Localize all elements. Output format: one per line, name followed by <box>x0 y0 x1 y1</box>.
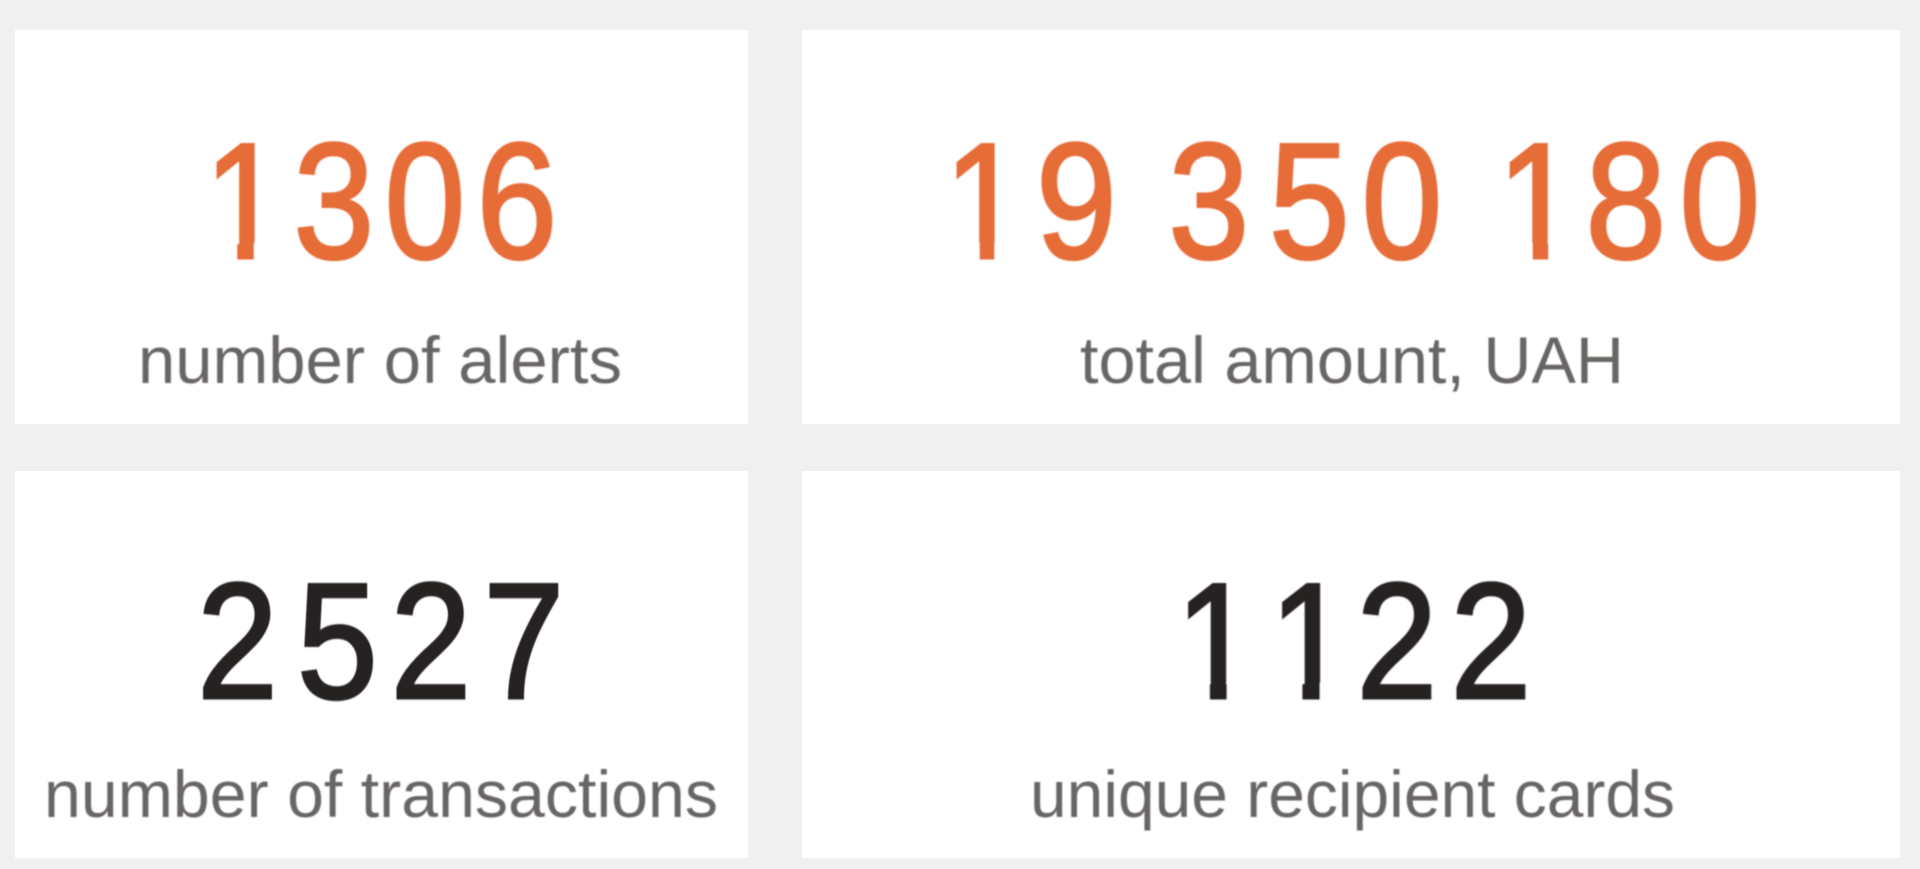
label: number of transactions: number of transactions <box>44 757 718 831</box>
value: number of transactions: 2527 <box>197 548 564 733</box>
panel: total amount <box>802 30 1900 424</box>
label: unique recipient cards: unique recipient cards <box>1030 757 1675 831</box>
label: number of alerts: number of alerts <box>138 323 622 397</box>
value: number of alerts: 1306 <box>204 108 557 293</box>
panel: number of transactions <box>15 471 748 858</box>
value: unique recipient cards: 1122 <box>1176 548 1531 733</box>
value: total amount: 19 350 180 <box>944 108 1760 293</box>
panel: number of alerts <box>15 30 748 424</box>
panel: unique recipient cards <box>802 471 1900 858</box>
label: total amount: total amount, UAH <box>1080 323 1624 397</box>
